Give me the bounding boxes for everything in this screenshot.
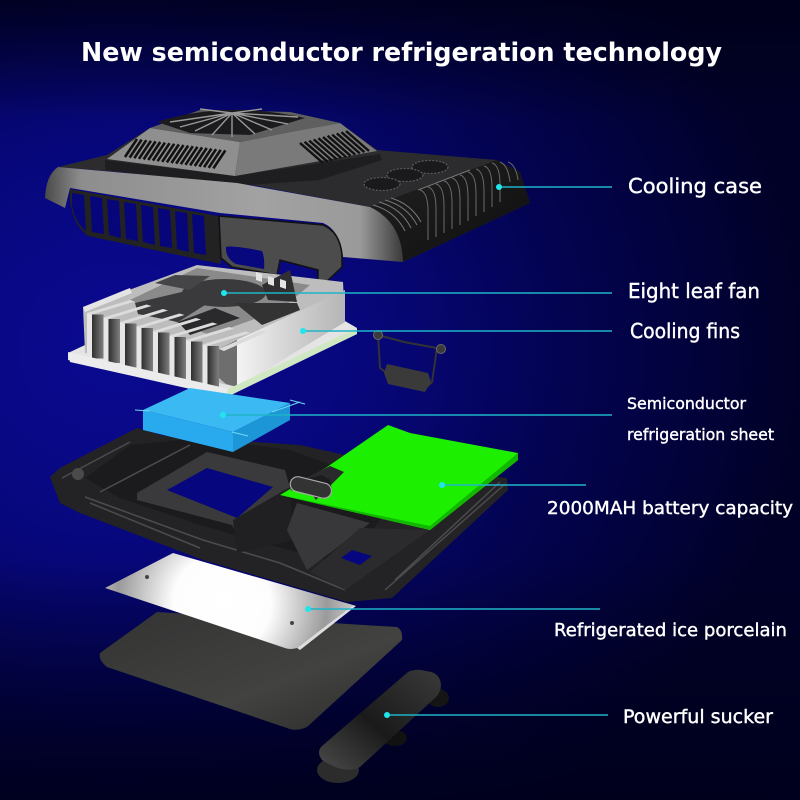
body: [83, 265, 345, 387]
panel: ice porcelain plate: [100, 553, 402, 730]
label: cooling case: Cooling case: [628, 174, 762, 198]
label: cooling fins: Cooling fins: [630, 319, 740, 343]
housing right face: [235, 123, 377, 176]
panel: green battery: [280, 425, 518, 530]
housing top: [150, 110, 340, 142]
raised housing base: [105, 154, 382, 186]
recess: [130, 268, 310, 335]
case right ribbed face: [370, 160, 530, 262]
cooling fins: [87, 300, 267, 390]
icon: power button bracket: [374, 330, 446, 392]
leader: semiconductor sheet: [220, 412, 612, 418]
round grills: [364, 160, 448, 190]
frame window: [167, 468, 273, 518]
fan blades: [135, 270, 300, 335]
base plate front: [68, 352, 230, 397]
side panel with cut-outs: [219, 216, 342, 285]
label: battery capacity: 2000MAH battery capacity: [547, 498, 793, 519]
frame rim highlights: [62, 442, 505, 590]
label: eight leaf fan: Eight leaf fan: [628, 279, 760, 303]
title: New semiconductor refrigeration technology: [81, 38, 722, 68]
front band: [45, 167, 403, 262]
frame tray walls: [137, 452, 290, 540]
frame right floor: [287, 503, 370, 570]
frame right notch: [341, 550, 372, 565]
leader: eight leaf fan: [221, 290, 612, 296]
leader: sucker: [384, 712, 608, 718]
label: refrigeration sheet: refrigeration sheet: [627, 425, 774, 444]
label: sucker: Powerful sucker: [623, 706, 773, 728]
leader: cooling case: [496, 184, 612, 190]
case top surface: [58, 110, 530, 262]
panel: semiconductor sheet: [135, 388, 305, 452]
panel: cooling case: [45, 109, 530, 285]
frame vertical wall: [233, 487, 293, 553]
right side face: [237, 290, 345, 387]
frame outer shell: [50, 428, 508, 602]
panel: sucker: [317, 670, 449, 783]
usb-c port: [289, 466, 344, 500]
label: semiconductor: Semiconductor: [627, 394, 746, 413]
leader: battery: [439, 482, 586, 488]
panel: heat sink: [68, 265, 357, 397]
panel: lower frame: [50, 428, 508, 602]
front vents: [125, 139, 225, 168]
metal sheet: [105, 553, 353, 649]
leader: porcelain: [305, 606, 600, 612]
base plate: [68, 321, 357, 397]
dark mat: [100, 612, 402, 730]
housing front face: [107, 128, 240, 176]
grill frame: [70, 189, 221, 264]
right vents: [300, 131, 369, 163]
top rim fins: [83, 272, 286, 312]
fan grille: [157, 109, 305, 137]
label: ice porcelain: Refrigerated ice porcelain: [554, 620, 787, 641]
frame inner floor: [85, 438, 380, 565]
leader: cooling fins: [300, 328, 612, 334]
